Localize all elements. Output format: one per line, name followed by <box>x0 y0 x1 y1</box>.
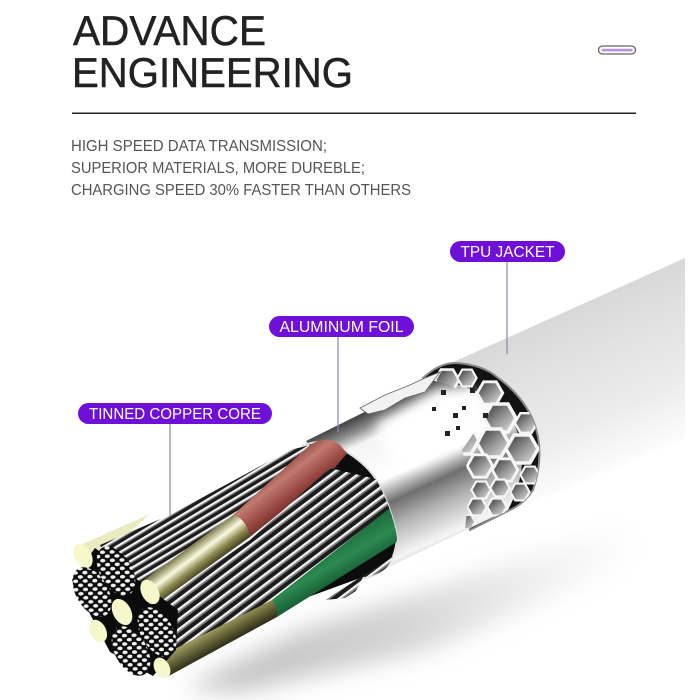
title: ADVANCE <box>73 7 266 54</box>
honeycomb mesh <box>435 370 540 529</box>
description text: HIGH SPEED DATA TRANSMISSION; <box>71 138 327 155</box>
strand face: top <box>89 540 143 602</box>
callout: TPU jacket: TPU JACKET <box>460 244 555 261</box>
callout: tinned copper core: TINNED COPPER CORE <box>89 406 261 423</box>
callout: aluminum foil <box>269 316 414 432</box>
strand face: left <box>65 561 119 623</box>
wires clipped by rim <box>78 440 400 678</box>
bundle: lower strands <box>164 468 397 648</box>
callout: TPU jacket <box>450 241 565 354</box>
description text: SUPERIOR MATERIALS, MORE DUREBLE; <box>71 160 365 177</box>
conductor face: top left <box>69 541 97 571</box>
foil interior <box>290 441 397 600</box>
green wire <box>272 508 400 617</box>
strand face: right <box>130 601 184 663</box>
divider rule <box>72 112 636 114</box>
conductor face: upper yellow <box>136 577 164 607</box>
foil torn edge <box>360 372 440 414</box>
yellow conductor <box>140 515 250 603</box>
callout: aluminum foil: ALUMINUM FOIL <box>280 319 404 336</box>
title <box>72 7 353 96</box>
conductor face: center <box>107 595 137 629</box>
conductor face: lower left <box>85 617 111 645</box>
mesh specks <box>432 388 488 436</box>
jacket opening <box>423 363 540 530</box>
foil upper highlight <box>375 388 485 470</box>
conductor face: bottom <box>150 655 174 681</box>
description text: CHARGING SPEED 30% FASTER THAN OTHERS <box>71 182 411 199</box>
red wire <box>233 440 348 537</box>
cable illustration <box>65 258 685 692</box>
title: ENGINEERING <box>72 49 353 96</box>
icon: USB-C port <box>598 46 636 54</box>
face cluster backing <box>72 548 178 676</box>
foil rim <box>302 442 397 579</box>
strand face: bottom <box>104 620 158 682</box>
gold conductor lower <box>166 600 278 676</box>
aluminum foil <box>306 382 522 574</box>
TPU jacket <box>440 258 685 512</box>
strands behind green <box>325 555 395 600</box>
description text <box>71 138 411 199</box>
callout: tinned copper core <box>78 403 272 516</box>
conductor: top left yellow <box>82 514 150 554</box>
bundle: upper strands <box>100 444 311 582</box>
cable shadow <box>185 520 640 692</box>
